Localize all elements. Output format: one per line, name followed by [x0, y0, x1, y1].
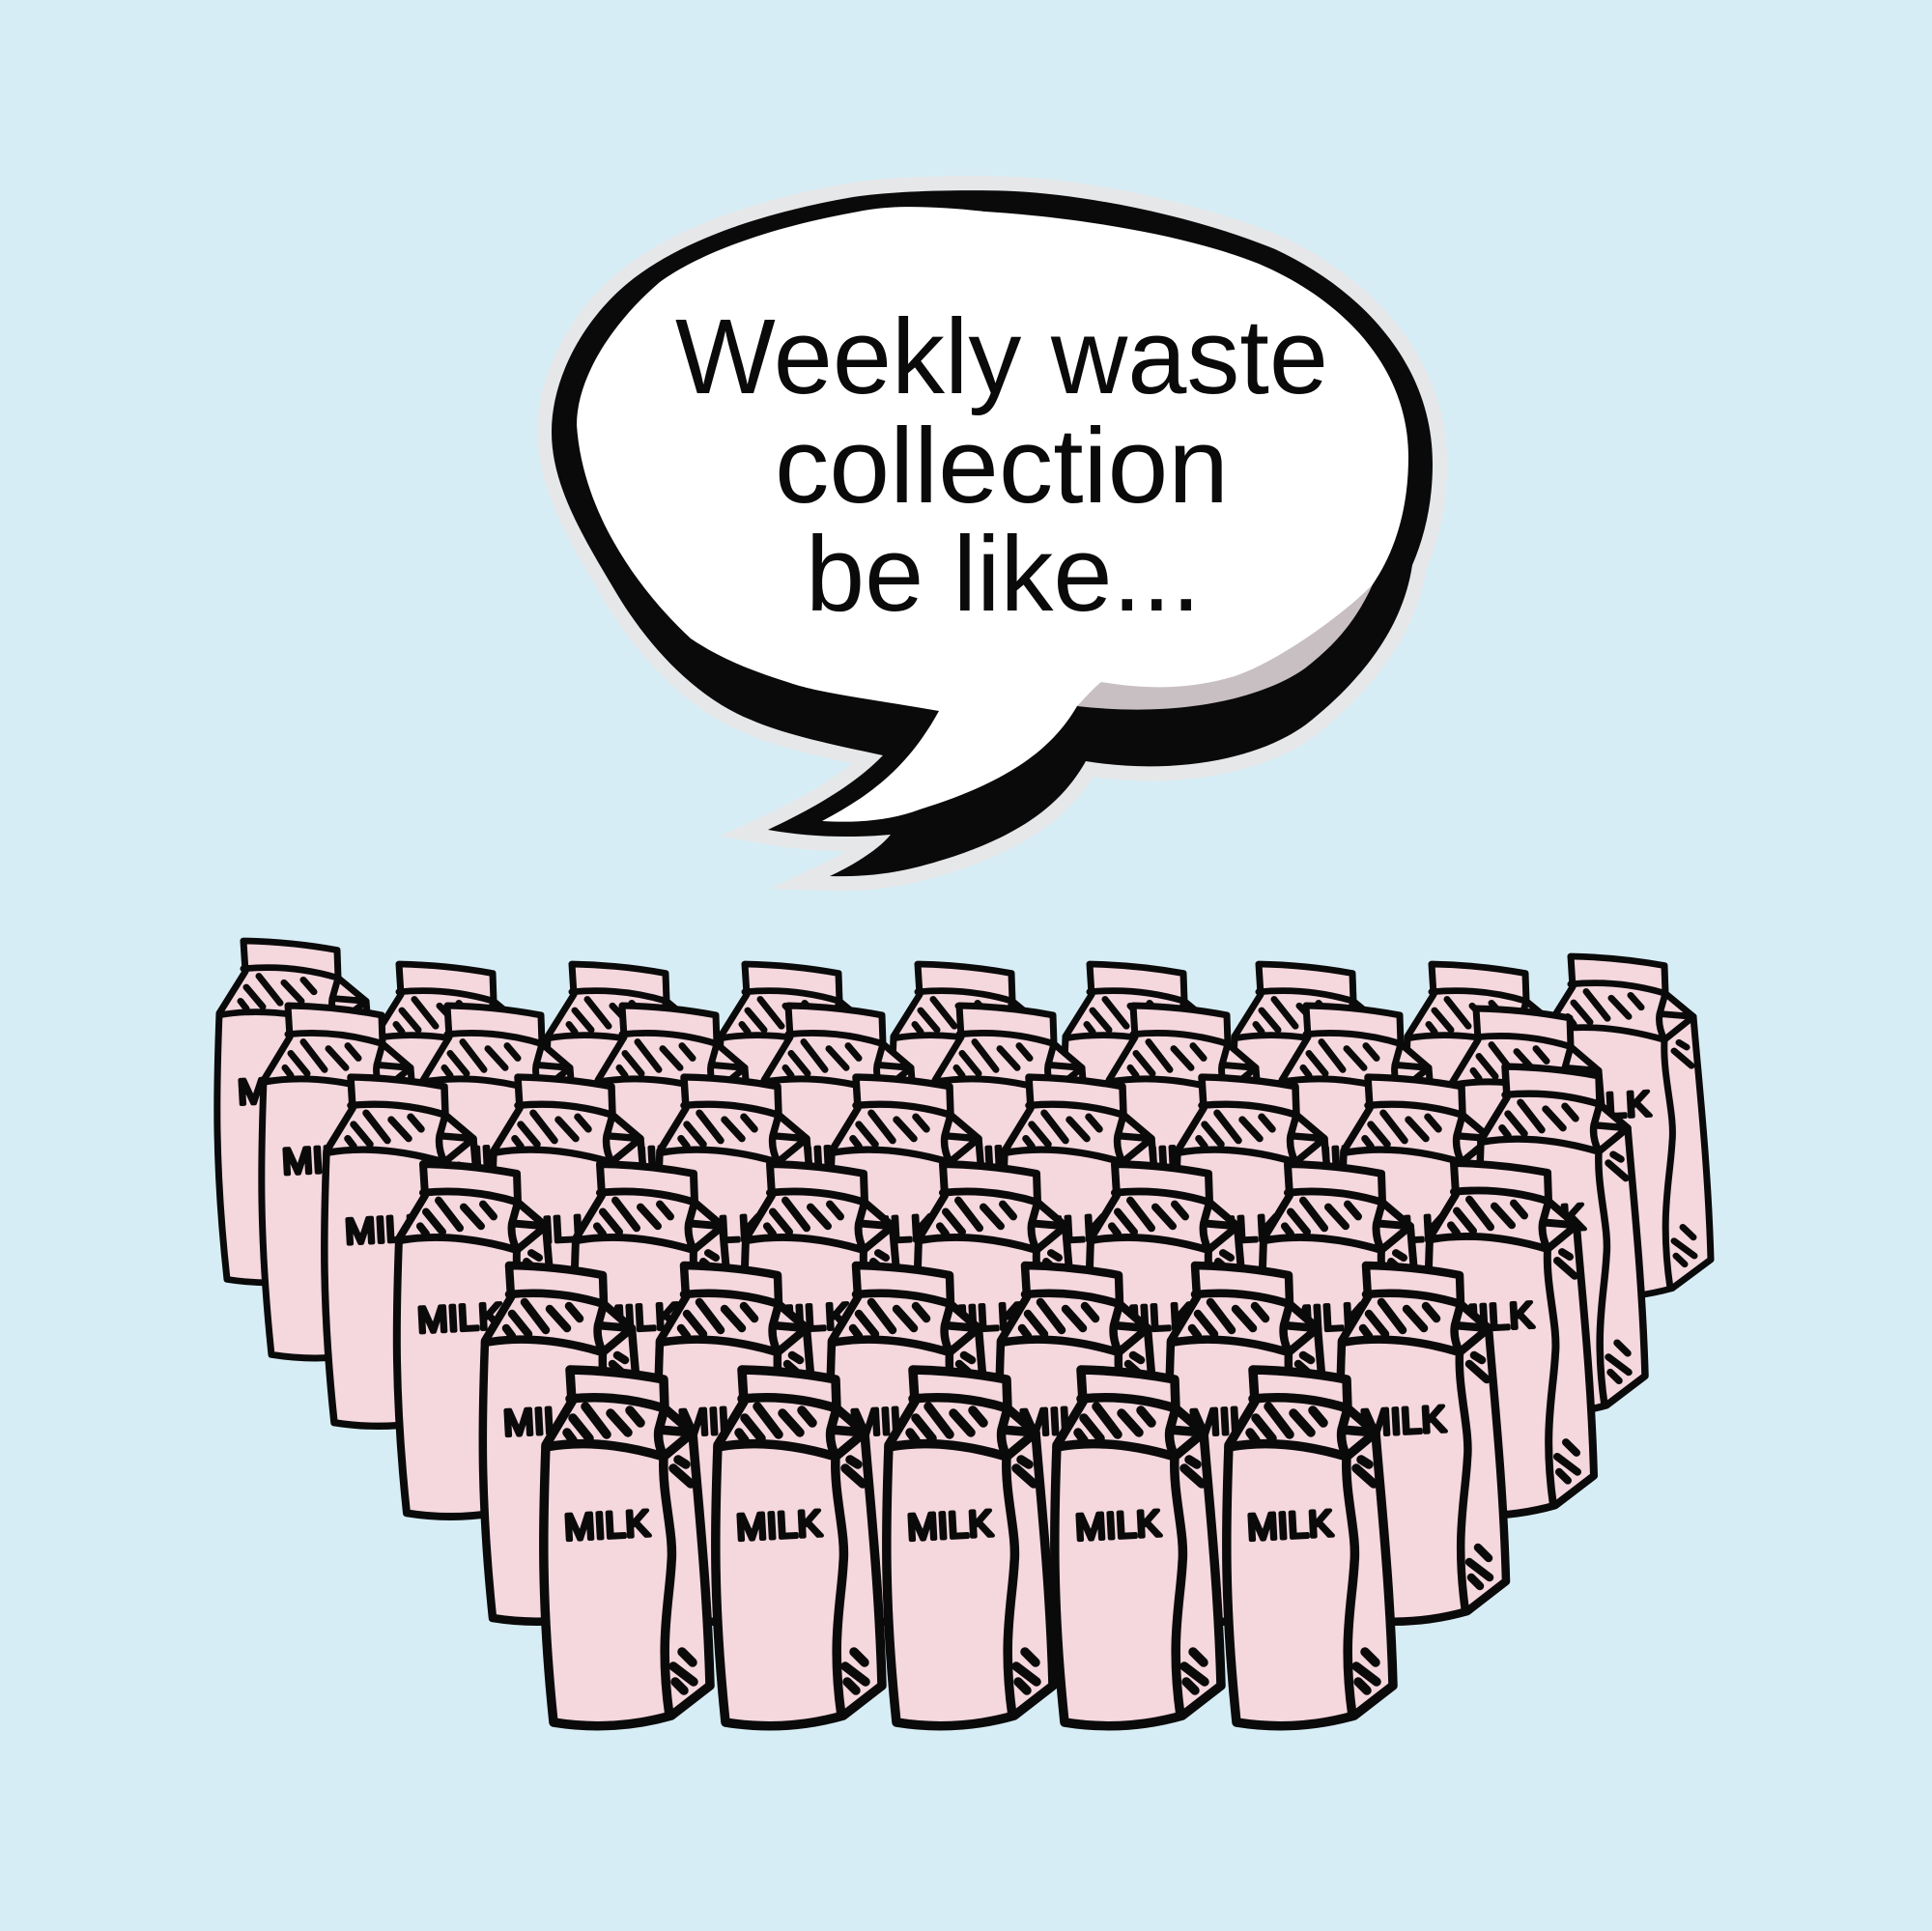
carton row 5 [483, 1265, 1506, 1622]
carton row 1 (back): MILK [237, 1067, 325, 1112]
carton row 4: MILK [416, 1296, 504, 1341]
carton row 1 (back): MILK [392, 1091, 480, 1135]
bubble text: be like... [806, 515, 1201, 634]
carton row 4: MILK [1447, 1295, 1535, 1340]
carton row 2: MILK [1299, 1138, 1387, 1182]
carton row 6 (front): MILK [563, 1504, 651, 1548]
carton row 2: MILK [952, 1138, 1040, 1182]
carton row 4: MILK [1281, 1296, 1369, 1341]
carton row 1 (back): MILK [1252, 1091, 1340, 1135]
carton row 4 [397, 1163, 1594, 1517]
carton row 1 (back): MILK [1564, 1083, 1652, 1127]
carton row 5: MILK [849, 1400, 937, 1444]
carton row 4: MILK [936, 1296, 1024, 1341]
carton row 5: MILK [1188, 1400, 1276, 1444]
carton row 4: MILK [763, 1296, 851, 1341]
carton row 6 (front) [544, 1370, 1393, 1726]
carton row 6 (front): MILK [1074, 1504, 1162, 1548]
carton row 2: MILK [615, 1138, 703, 1182]
carton row 2: MILK [781, 1138, 869, 1182]
carton row 2: MILK [440, 1138, 528, 1182]
carton row 4: MILK [1108, 1296, 1196, 1341]
carton row 1 (back): MILK [1425, 1091, 1513, 1135]
carton row 3: MILK [344, 1207, 432, 1252]
carton row 3 [325, 1066, 1645, 1426]
carton row 3: MILK [1195, 1207, 1283, 1252]
carton row 2: MILK [281, 1138, 369, 1182]
carton row 2: MILK [1126, 1138, 1214, 1182]
carton row 1 (back): MILK [911, 1091, 999, 1135]
carton row 6 (front): MILK [906, 1504, 994, 1548]
carton row 2: MILK [1469, 1141, 1557, 1185]
carton row 5: MILK [1359, 1400, 1447, 1444]
carton row 1 (back) [217, 941, 1711, 1306]
carton row 1 (back): MILK [738, 1091, 826, 1135]
carton row 1 (back): MILK [1083, 1091, 1171, 1135]
carton row 3: MILK [1361, 1207, 1449, 1252]
milk cartons crowd [217, 941, 1711, 1726]
bubble text [675, 298, 1328, 634]
bubble text: collection [775, 407, 1229, 525]
carton row 5: MILK [677, 1400, 765, 1444]
carton row 3: MILK [677, 1207, 765, 1252]
speech bubble [552, 190, 1433, 876]
carton row 2 [262, 1006, 1616, 1361]
carton row 3: MILK [511, 1207, 599, 1252]
carton row 6 (front): MILK [1246, 1504, 1334, 1548]
carton row 1 (back): MILK [565, 1091, 653, 1135]
bubble text: Weekly waste [675, 298, 1328, 416]
carton row 4: MILK [593, 1296, 681, 1341]
carton row 3: MILK [849, 1207, 937, 1252]
carton row 3: MILK [1498, 1197, 1586, 1241]
carton row 5: MILK [502, 1400, 590, 1444]
carton row 5: MILK [1018, 1400, 1106, 1444]
carton row 6 (front): MILK [735, 1504, 823, 1548]
carton row 3: MILK [1022, 1207, 1110, 1252]
